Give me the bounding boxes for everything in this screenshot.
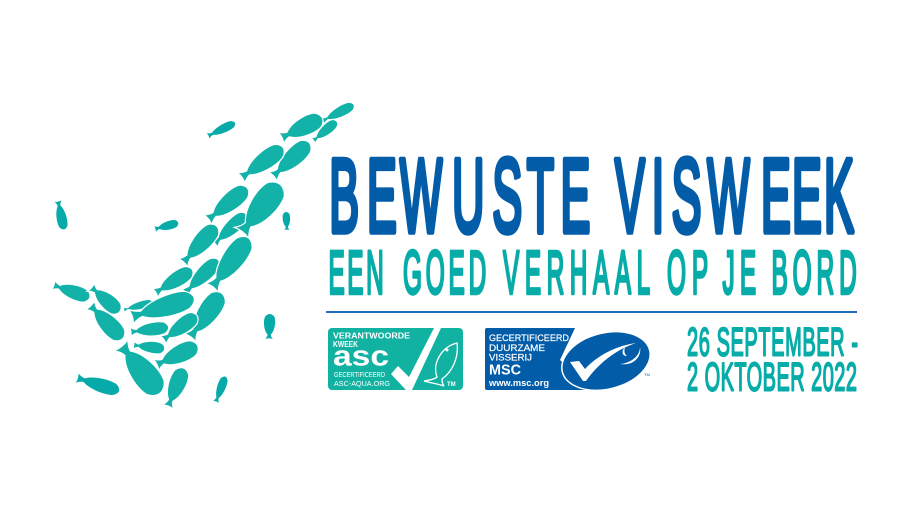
subtitle: Een goed verhaal op je bord: EEN [328,238,384,307]
title: Bewuste Visweek [329,138,854,254]
subtitle: Een goed verhaal op je bord [328,238,857,307]
subtitle: Een goed verhaal op je bord: JE [722,238,756,307]
date range: 2 OKTOBER 2022 [687,354,857,399]
date range [687,319,858,399]
MSC logo [485,323,656,399]
MSC logo: MSC [489,362,521,378]
date range: 26 SEPTEMBER - [687,319,858,364]
MSC logo: www.msc.org [488,378,549,389]
check mark made of fish school [51,100,357,410]
ASC logo: GECERTIFICEERD [334,370,385,379]
subtitle: Een goed verhaal op je bord: VERHAAL [503,238,650,307]
ASC logo: ASC-AQUA.ORG [334,379,390,388]
ASC logo [328,328,463,390]
icon: white check [391,328,441,390]
icon: ASC fish [424,343,457,386]
stray small fish [53,119,291,403]
MSC logo: VISSERIJ [489,352,532,364]
icon: MSC fish eye and mouth [620,347,640,364]
MSC logo: TM [644,372,650,377]
ASC logo: TM [447,382,456,388]
icon: MSC blue fish oval [556,323,656,399]
ASC logo: asc [333,340,389,372]
subtitle: Een goed verhaal op je bord: OP [667,238,708,307]
icon: MSC white check [570,343,636,381]
MSC logo: DUURZAME [489,343,545,354]
ASC logo: VERANTWOORDE [333,332,411,340]
title: Bewuste Visweek: VISWEEK [615,138,854,254]
divider line [326,311,857,313]
MSC logo: GECERTIFICEERD [489,333,569,344]
title: Bewuste Visweek: BEWUSTE [329,138,590,254]
subtitle: Een goed verhaal op je bord: GOED [403,238,486,307]
ASC logo: KWEEK [333,340,358,349]
subtitle: Een goed verhaal op je bord: BORD [772,238,857,307]
